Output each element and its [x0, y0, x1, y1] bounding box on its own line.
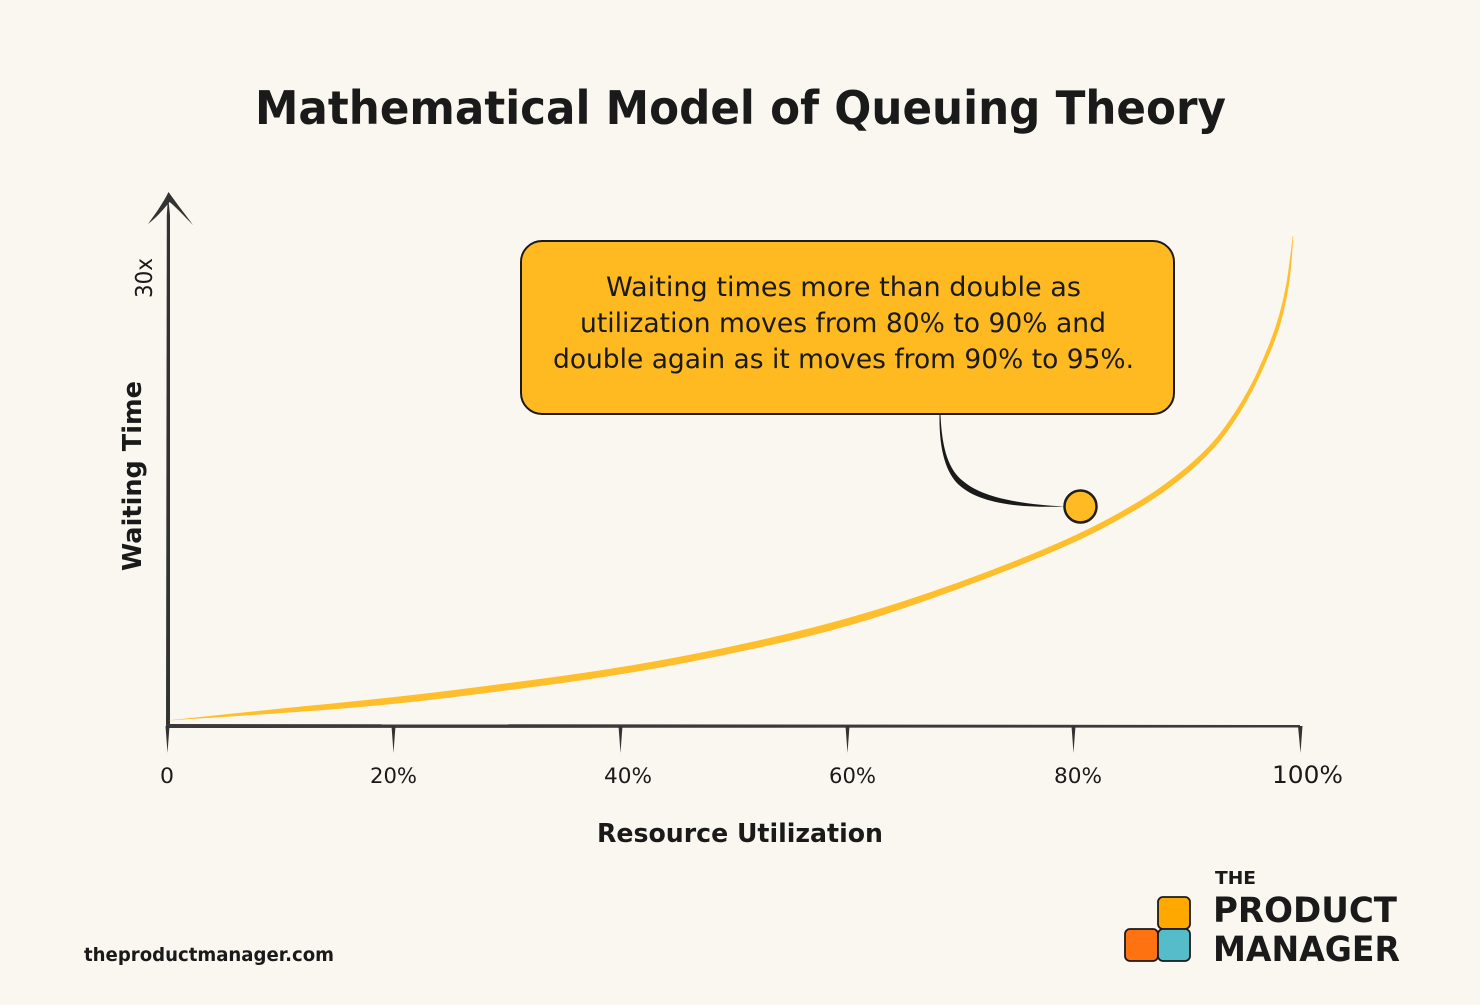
x axis labels: 100% [1272, 761, 1343, 789]
curve [167, 236, 1293, 720]
callout: utilization moves from 80% to 90% and [580, 308, 1106, 339]
x axis labels [160, 761, 1343, 789]
x axis with tick marks [166, 724, 1302, 753]
callout leader line [939, 415, 1065, 507]
logo icon [1125, 897, 1190, 961]
callout: double again as it moves from 90% to 95%. [553, 344, 1134, 375]
callout: Waiting times more than double as [606, 272, 1081, 303]
logo [1125, 868, 1400, 970]
x axis labels: 60% [829, 764, 876, 788]
x axis labels: 0 [160, 764, 174, 788]
logo wordmark [1213, 868, 1400, 970]
y axis with arrow [148, 192, 193, 728]
x axis title: Resource Utilization [597, 819, 883, 849]
marker dot [1064, 490, 1096, 522]
y axis value label: 30x [132, 258, 158, 298]
y axis title: Waiting Time [118, 381, 148, 571]
logo wordmark: THE [1215, 868, 1256, 889]
chart: queuing curve [148, 192, 1302, 753]
callout [521, 241, 1174, 414]
logo wordmark: MANAGER [1213, 930, 1400, 970]
x axis labels: 40% [604, 764, 652, 788]
title: Mathematical Model of Queuing Theory [255, 81, 1226, 135]
logo wordmark: PRODUCT [1213, 891, 1397, 931]
x axis labels: 20% [370, 764, 417, 788]
x axis labels: 80% [1054, 764, 1102, 788]
source url: theproductmanager.com [84, 944, 334, 966]
